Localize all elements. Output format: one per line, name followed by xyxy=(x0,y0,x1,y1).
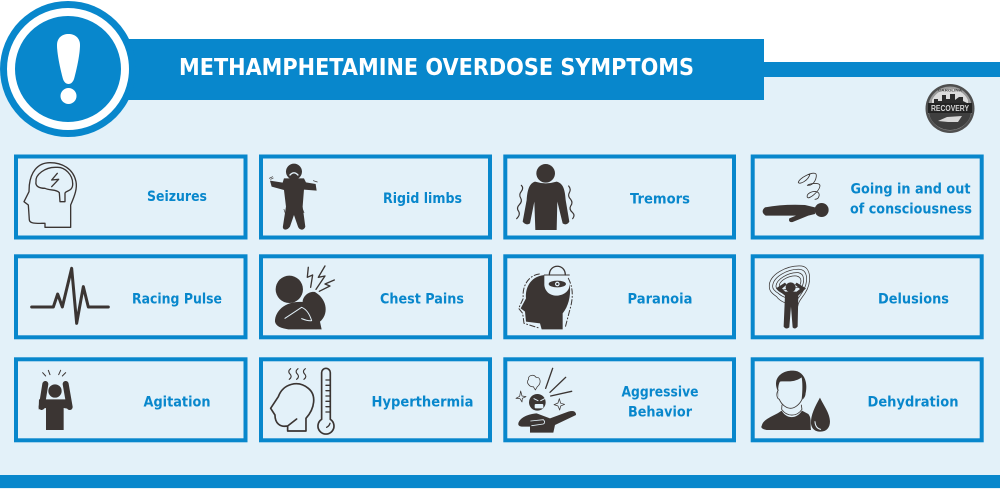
panel: rigid limbs xyxy=(261,156,490,238)
label: Dehydration xyxy=(868,394,958,410)
label: Paranoia xyxy=(628,291,692,307)
icon: angry figure xyxy=(516,368,576,433)
icon: person with water drop xyxy=(761,371,830,432)
panel: going in and out of consciousness xyxy=(753,156,982,238)
icon: head with lock and eye xyxy=(519,266,572,329)
label: Agitation xyxy=(144,394,210,410)
panel: dehydration xyxy=(753,359,982,440)
logo: Carolina Recovery badge: CAROLINA xyxy=(938,88,962,92)
icon: figure with concentric swirls xyxy=(769,266,810,329)
label: Tremors xyxy=(630,191,690,207)
logo: Carolina Recovery badge: RECOVERY xyxy=(931,104,970,113)
icon: shaking figure xyxy=(517,164,574,230)
panel: tremors xyxy=(505,156,734,238)
label: Seizures xyxy=(147,189,207,205)
panel: aggressive behavior xyxy=(505,359,734,440)
label: Chest Pains xyxy=(380,291,464,307)
icon: exclamation badge xyxy=(0,1,136,137)
logo: Carolina Recovery badge xyxy=(926,84,974,133)
label line 2: Behavior xyxy=(628,404,693,420)
icon: pulse line xyxy=(32,268,108,323)
icon: figure hands on head xyxy=(39,370,72,430)
header banner xyxy=(100,39,764,100)
label: Going in and out xyxy=(850,181,971,197)
label: Racing Pulse xyxy=(132,291,222,307)
icon: stiff figure xyxy=(269,164,317,230)
label: Rigid limbs xyxy=(383,191,462,207)
panel: delusions xyxy=(753,256,982,337)
title: METHAMPHETAMINE OVERDOSE SYMPTOMS xyxy=(179,55,694,81)
panel: agitation xyxy=(16,359,246,440)
label: Hyperthermia xyxy=(372,394,474,410)
panel: seizures xyxy=(16,156,246,238)
header stripe right xyxy=(760,62,1000,77)
panel: racing pulse xyxy=(16,256,246,337)
panel: chest pains xyxy=(261,256,490,337)
label line 2: of consciousness xyxy=(850,201,972,217)
icon: lying figure with spiral xyxy=(763,173,829,222)
label: Aggressive xyxy=(622,384,699,400)
icon: head with brain and lightning xyxy=(24,163,76,227)
icon: figure clutching chest xyxy=(275,266,334,329)
icon: head with steam and thermometer xyxy=(271,368,334,434)
panel: paranoia xyxy=(505,256,734,337)
footer bar xyxy=(0,475,1000,488)
panel: hyperthermia xyxy=(261,359,490,440)
label: Delusions xyxy=(878,291,949,307)
